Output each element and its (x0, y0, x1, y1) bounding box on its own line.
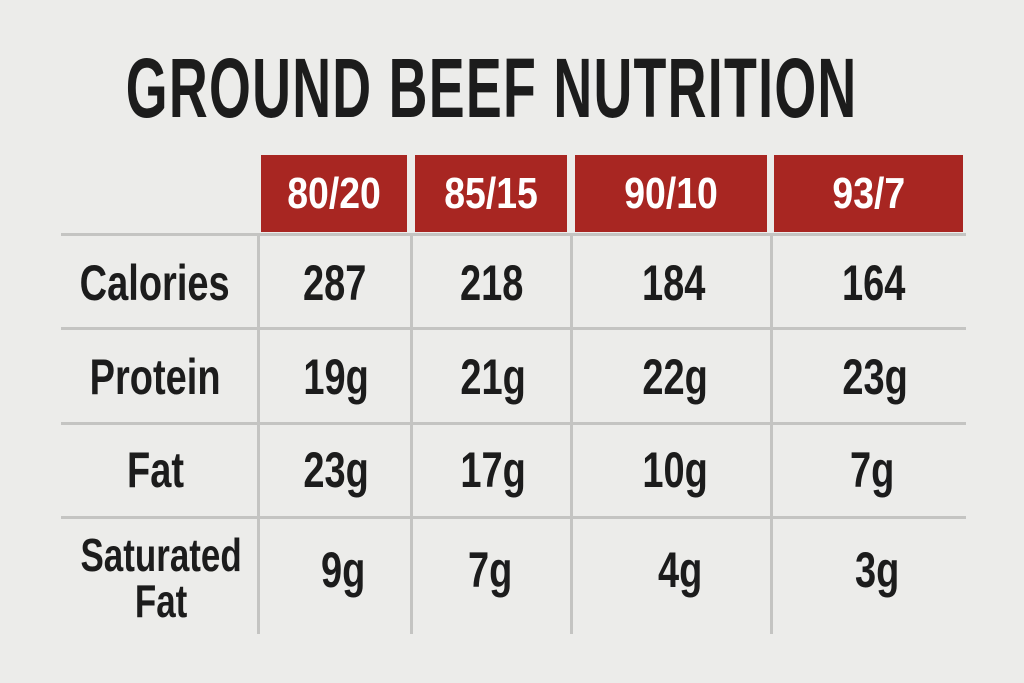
row: calories values: 218 (460, 255, 523, 311)
row: saturated fat values: 9g (321, 542, 365, 598)
row: saturated fat values (321, 542, 899, 598)
header: 80/20 (261, 155, 407, 232)
row: fat values: 10g (642, 442, 708, 498)
row: fat values: 23g (303, 442, 369, 498)
row: calories values: 184 (642, 255, 705, 311)
row label: Saturated Fat (80, 529, 242, 627)
row: calories values (303, 255, 906, 311)
row label: Protein: Protein (90, 349, 220, 405)
header: 85/15 (415, 155, 567, 232)
header: 80/20: 80/20 (287, 169, 381, 218)
row: fat values: 17g (460, 442, 526, 498)
row: protein values: 21g (460, 349, 526, 405)
row label: Calories: Calories (80, 255, 230, 311)
header: 85/15: 85/15 (444, 169, 538, 218)
row: saturated fat values: 4g (658, 542, 702, 598)
row: protein values: 23g (842, 349, 908, 405)
row: fat values (303, 442, 894, 498)
header: 90/10: 90/10 (624, 169, 718, 218)
row label: Saturated Fat: Saturated (80, 529, 242, 581)
header: 93/7 (774, 155, 963, 232)
row label: Fat: Fat (126, 442, 184, 498)
title: GROUND BEEF NUTRITION (126, 41, 858, 135)
header: 93/7: 93/7 (832, 169, 905, 218)
row: protein values: 19g (303, 349, 369, 405)
row: protein values: 22g (642, 349, 708, 405)
row: calories values: 287 (303, 255, 366, 311)
row: fat values: 7g (850, 442, 894, 498)
row: protein values (303, 349, 908, 405)
row: calories values: 164 (842, 255, 905, 311)
row label: Saturated Fat: Fat (135, 575, 187, 627)
row: saturated fat values: 3g (855, 542, 899, 598)
header: 90/10 (575, 155, 767, 232)
row: saturated fat values: 7g (468, 542, 512, 598)
